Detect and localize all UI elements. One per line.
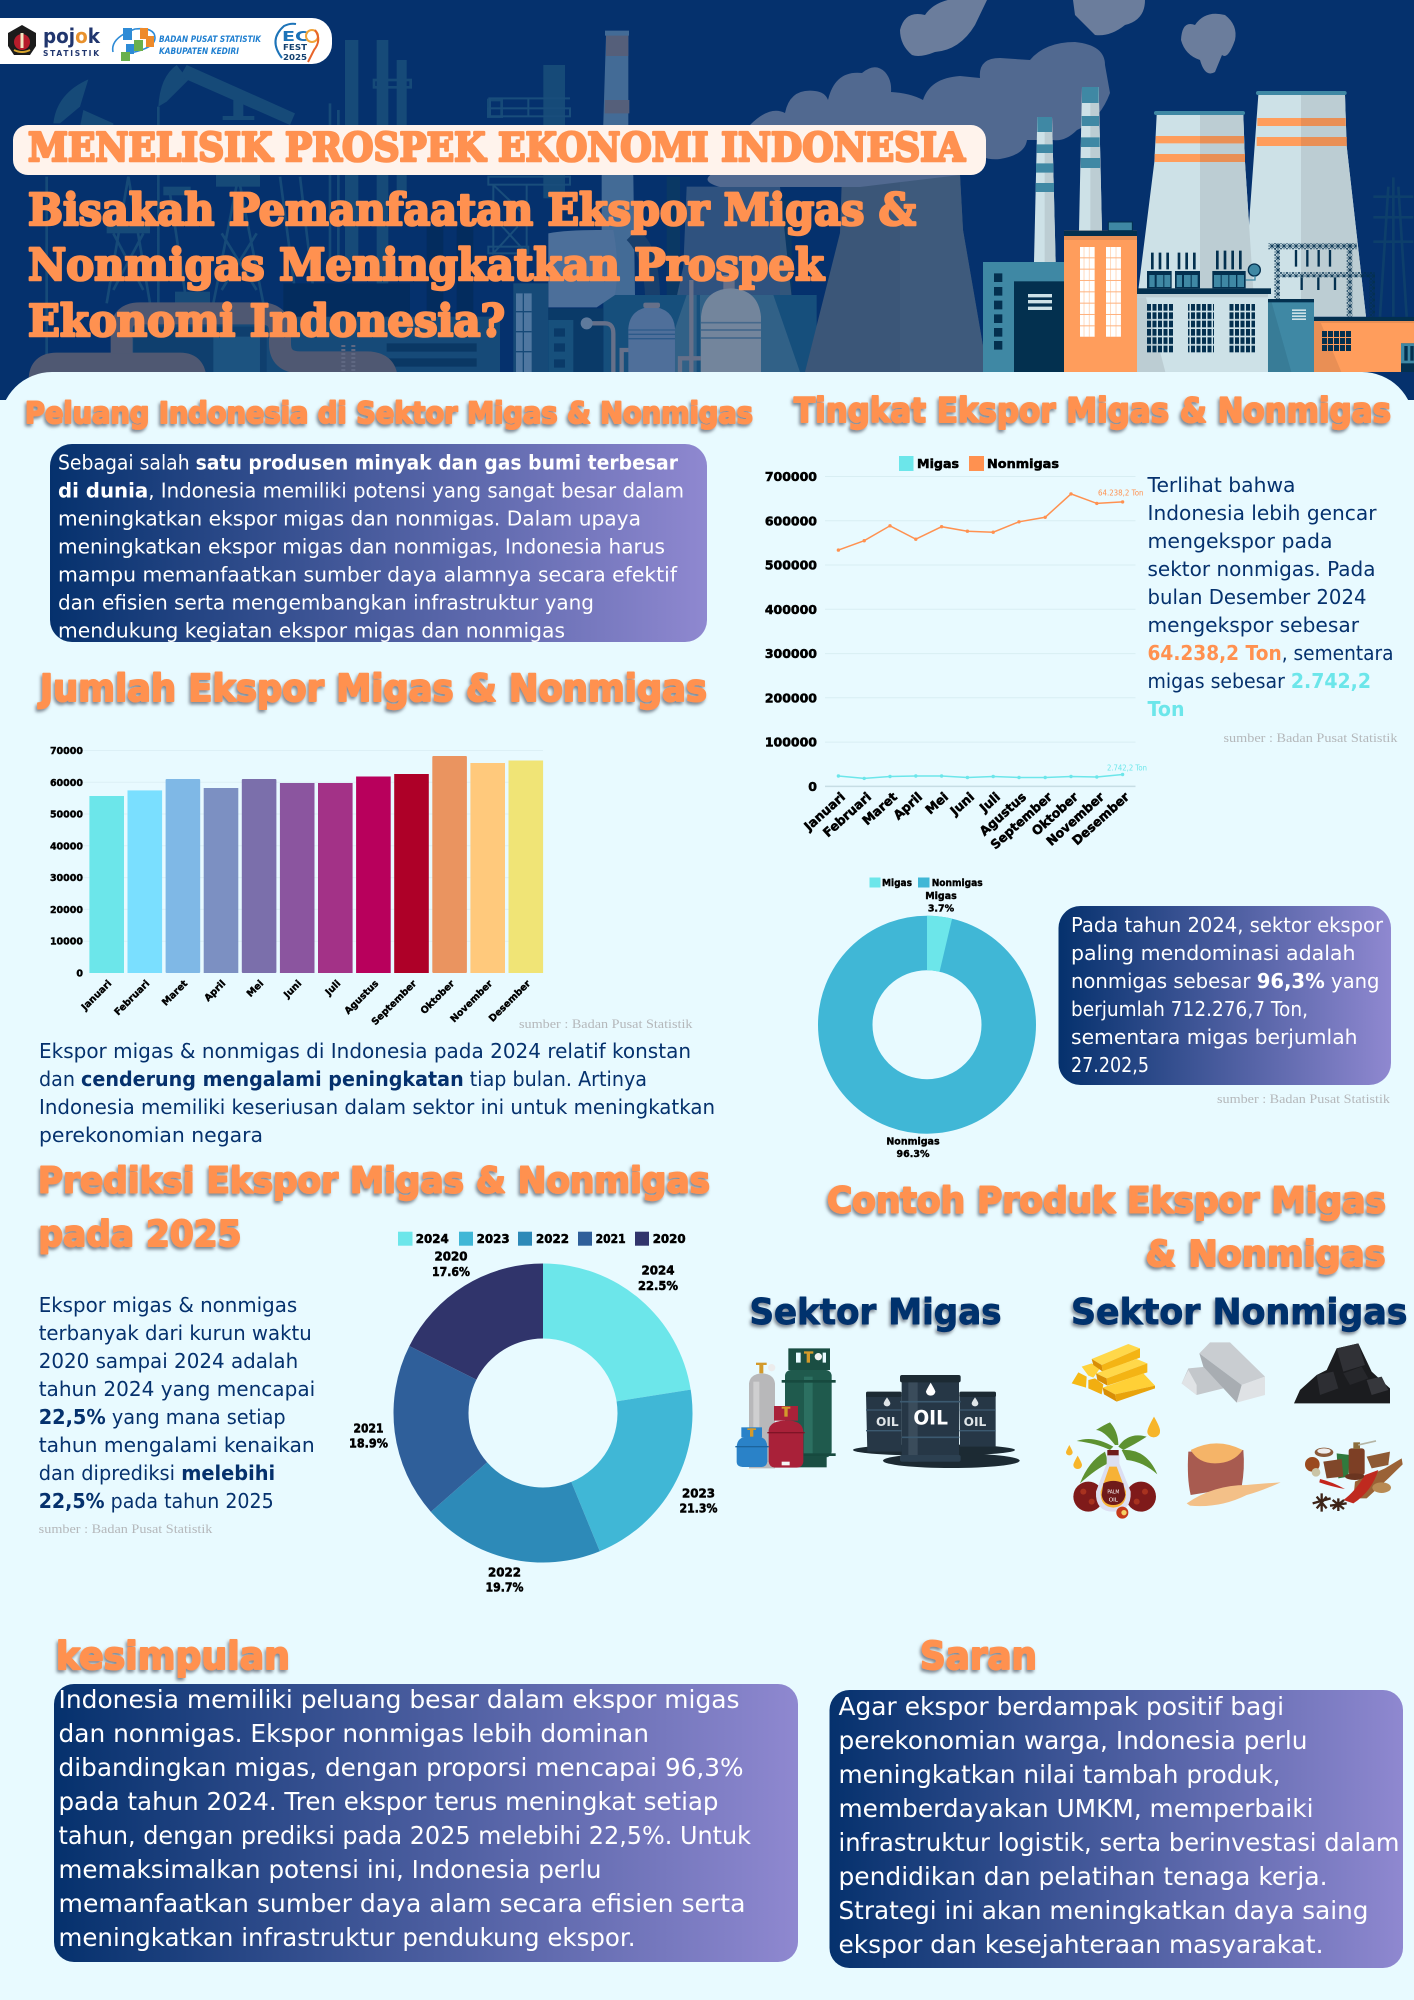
line chart: tingkat ekspor: Juni xyxy=(946,789,977,819)
donut chart: persentase per tahun: 19.7% xyxy=(486,1580,524,1594)
paragraph: prediksi: terbanyak dari kurun waktu xyxy=(39,1321,312,1345)
line chart: tingkat ekspor: Agustus xyxy=(976,789,1029,839)
text box: kesimpulan: tahun, dengan prediksi pada 2025 melebihi 22,5%. Untuk xyxy=(58,1821,751,1850)
bar chart: jumlah ekspor per bulan: September xyxy=(370,978,419,1028)
heading: Prediksi Ekspor xyxy=(38,1160,710,1255)
line chart: tingkat ekspor: Juli xyxy=(976,789,1003,816)
text box: dominasi nonmigas: 27.202,5 xyxy=(1071,1053,1149,1077)
donut chart: proporsi migas nonmigas xyxy=(845,878,1009,1160)
icon: grain sack xyxy=(1187,1443,1281,1506)
paragraph: terlihat bahwa: mengekspor sebesar xyxy=(1148,613,1360,637)
text box: kesimpulan: dibandingkan migas, dengan proporsi mencapai 96,3% xyxy=(58,1753,744,1782)
line chart: tingkat ekspor: November xyxy=(1043,789,1108,849)
donut chart: proporsi migas nonmigas: 96.3% xyxy=(897,1149,930,1160)
bar chart: jumlah ekspor per bulan: Juni xyxy=(281,978,304,1001)
line chart: tingkat ekspor xyxy=(765,456,1147,852)
text box: dominasi nonmigas: paling mendominasi adalah xyxy=(1071,941,1356,965)
series: nonmigas xyxy=(838,494,1123,550)
donut chart: persentase per tahun: 2020 xyxy=(434,1248,468,1264)
bar chart: jumlah ekspor per bulan: 10000 xyxy=(50,937,83,948)
text box: saran: Agar ekspor berdampak positif bagi xyxy=(838,1692,1284,1721)
bar chart: jumlah ekspor per bulan: Maret xyxy=(160,978,190,1008)
line chart: tingkat ekspor: 100000 xyxy=(765,735,817,750)
bar chart: jumlah ekspor per bulan: 70000 xyxy=(50,746,83,757)
donut chart: persentase per tahun: 21.3% xyxy=(680,1500,718,1516)
paragraph: prediksi: Ekspor migas & nonmigas xyxy=(39,1293,297,1317)
subheading: Sektor Migas: Sektor Migas xyxy=(750,1292,1002,1333)
main question title xyxy=(28,185,916,347)
line chart: tingkat ekspor: 700000 xyxy=(765,469,817,484)
logo: pojok statistik: pojok xyxy=(43,24,101,48)
logo text: Badan Pusat Statistik: KABUPATEN KEDIRI xyxy=(159,47,240,57)
line chart: tingkat ekspor: 600000 xyxy=(765,513,817,528)
text box: saran: Strategi ini akan meningkatkan daya saing xyxy=(838,1896,1368,1925)
bar chart: jumlah ekspor per bulan: 0 xyxy=(76,968,83,980)
line chart: tingkat ekspor: Desember xyxy=(1069,789,1133,848)
main question title: Bisakah Pemanfaatan Ekspor Migas & xyxy=(28,185,916,236)
line chart: tingkat ekspor: 64.238,2 Ton xyxy=(1098,488,1144,498)
logo text: Badan Pusat Statistik: BADAN PUSAT STATISTIK xyxy=(159,35,262,45)
heading: Peluang Indonesia: Peluang Indonesia di Sektor Migas & Nonmigas xyxy=(25,396,753,430)
bar chart: jumlah ekspor per bulan: 60000 xyxy=(50,778,83,789)
heading: Contoh Produk: Contoh Produk Ekspor Migas xyxy=(827,1180,1386,1222)
bar chart: jumlah ekspor per bulan: 30000 xyxy=(50,873,83,884)
paragraph: terlihat bahwa: Terlihat bahwa xyxy=(1147,473,1296,497)
paragraph: terlihat bahwa: sektor nonmigas. Pada xyxy=(1148,557,1376,581)
icon: palm oil xyxy=(1066,1417,1160,1519)
text box: kesimpulan: memanfaatkan sumber daya alam secara efisien serta xyxy=(58,1889,746,1918)
bar chart: jumlah ekspor per bulan: Agustus xyxy=(343,978,381,1017)
text box: kesimpulan: memaksimalkan potensi ini, Indonesia perlu xyxy=(58,1855,602,1884)
bar chart: jumlah ekspor per bulan: 20000 xyxy=(50,905,83,916)
logo: Eco Fest 2025 xyxy=(275,24,318,62)
donut chart: persentase per tahun: 2023 xyxy=(682,1486,715,1500)
paragraph: prediksi xyxy=(39,1293,315,1513)
line chart: tingkat ekspor: 300000 xyxy=(765,646,817,661)
paragraph: terlihat bahwa xyxy=(1147,473,1394,721)
icon: oil barrels: OIL xyxy=(913,1407,948,1430)
donut chart: proporsi migas nonmigas: Migas xyxy=(925,891,957,902)
icon: oil barrels xyxy=(853,1375,1020,1468)
paragraph: terlihat bahwa: mengekspor pada xyxy=(1148,529,1332,553)
bar chart: jumlah ekspor per bulan: April xyxy=(202,978,228,1004)
donut chart: persentase per tahun: 2024 xyxy=(642,1262,675,1278)
logo text: Badan Pusat Statistik xyxy=(159,35,262,57)
icon: coal xyxy=(1294,1343,1390,1403)
text box: saran: pendidikan dan pelatihan tenaga kerja. xyxy=(838,1862,1328,1891)
text box: kesimpulan xyxy=(54,1684,798,1962)
line chart legend xyxy=(899,456,1059,471)
bar chart: jumlah ekspor per bulan xyxy=(50,746,543,1028)
bar chart: jumlah ekspor per bulan: 50000 xyxy=(50,810,83,820)
line chart: tingkat ekspor: 2.742,2 Ton xyxy=(1107,764,1147,772)
text box: dominasi nonmigas: sementara migas berjumlah xyxy=(1071,1025,1358,1049)
bar chart: jumlah ekspor per bulan: Oktober xyxy=(419,978,457,1017)
donut chart: proporsi migas nonmigas: Migas xyxy=(882,878,912,889)
paragraph: prediksi: tahun mengalami kenaikan xyxy=(39,1433,315,1457)
icon: silver bars xyxy=(1182,1342,1265,1403)
logo strip xyxy=(0,18,332,64)
heading: Saran: Saran xyxy=(920,1634,1037,1678)
line chart: tingkat ekspor: April xyxy=(890,789,925,823)
icon: gas cylinders xyxy=(735,1348,836,1468)
paragraph: ekspor relatif konstan: Indonesia memiliki keseriusan dalam sektor ini untuk meningkatkan xyxy=(39,1095,715,1119)
line chart: tingkat ekspor: Oktober xyxy=(1029,789,1082,838)
subheading: Sektor Nonmigas: Sektor Nonmigas xyxy=(1071,1292,1408,1333)
heading: kesimpulan: kesimpulan xyxy=(56,1634,290,1678)
text box: kesimpulan: dan nonmigas. Ekspor nonmigas lebih dominan xyxy=(58,1719,649,1748)
line chart: tingkat ekspor: 200000 xyxy=(765,690,817,705)
line chart: tingkat ekspor: Maret xyxy=(859,789,900,828)
paragraph: terlihat bahwa: 64.238,2 Ton, sementara xyxy=(1148,641,1394,665)
donut legend: 2020 xyxy=(653,1231,686,1246)
donut legend: 2022 xyxy=(536,1231,569,1246)
donut chart: persentase per tahun: 2021 xyxy=(354,1420,384,1436)
line chart: tingkat ekspor: 0 xyxy=(808,779,817,794)
donut chart: persentase per tahun: 22.5% xyxy=(638,1278,678,1293)
logo: Eco Fest 2025: FEST xyxy=(283,43,308,52)
text box: saran: ekspor dan kesejahteraan masyarakat. xyxy=(838,1930,1324,1959)
bar chart: jumlah ekspor per bulan: Desember xyxy=(487,978,533,1024)
paragraph: prediksi: dan diprediksi melebihi xyxy=(39,1461,275,1485)
title pill: MENELISIK PROSPEK EKONOMI INDONESIA xyxy=(28,125,966,171)
bar chart: jumlah ekspor per bulan: Februari xyxy=(112,978,152,1018)
donut chart: proporsi migas nonmigas: Nonmigas xyxy=(932,878,983,889)
background silhouettes: oil field xyxy=(38,40,502,380)
line chart: tingkat ekspor: 500000 xyxy=(765,558,817,572)
paragraph: ekspor relatif konstan: Ekspor migas & nonmigas di Indonesia pada 2024 relatif konstan xyxy=(39,1039,691,1063)
header background xyxy=(0,0,1414,400)
line chart: tingkat ekspor: Januari xyxy=(800,789,848,834)
text box: peluang: Sebagai salah satu produsen minyak dan gas bumi terbesar xyxy=(58,450,679,474)
logo: pojok statistik: STATISTIK xyxy=(43,49,100,58)
paragraph: terlihat bahwa: Ton xyxy=(1148,697,1184,721)
background cooling tower xyxy=(805,175,983,372)
paragraph: prediksi: 2020 sampai 2024 adalah xyxy=(39,1349,298,1373)
donut chart: proporsi migas nonmigas: Nonmigas xyxy=(886,1136,940,1148)
paragraph: prediksi: 22,5% yang mana setiap xyxy=(39,1405,286,1429)
text box: saran: memberdayakan UMKM, memperbaiki xyxy=(838,1794,1314,1823)
text box: dominasi nonmigas: Pada tahun 2024, sektor ekspor xyxy=(1071,913,1384,937)
logo: BPS xyxy=(113,28,155,61)
text box: peluang: meningkatkan ekspor migas dan nonmigas, Indonesia harus xyxy=(58,534,665,558)
logo: university emblem xyxy=(8,25,36,55)
text box: saran: infrastruktur logistik, serta berinvestasi dalam xyxy=(838,1828,1400,1857)
line chart legend: Migas xyxy=(917,456,959,471)
icon: spices xyxy=(1305,1441,1403,1512)
paragraph: ekspor relatif konstan xyxy=(39,1039,715,1147)
icon: palm oil: PALM xyxy=(1107,1489,1119,1495)
text box: peluang xyxy=(50,444,707,642)
heading: Prediksi Ekspor: Prediksi Ekspor Migas & Nonmigas xyxy=(38,1160,710,1202)
heading: Jumlah Ekspor: Jumlah Ekspor Migas & Nonmigas xyxy=(37,667,707,710)
smoke clouds xyxy=(708,0,1236,187)
icon: palm oil: OIL xyxy=(1109,1498,1119,1504)
source note: donut chart: sumber : Badan Pusat Statistik xyxy=(1217,1091,1391,1106)
donut legend: 2021 xyxy=(596,1231,626,1246)
heading: Contoh Produk xyxy=(827,1180,1386,1275)
text box: dominasi nonmigas: nonmigas sebesar 96,3% yang xyxy=(1071,969,1380,993)
heading: Prediksi Ekspor: pada 2025 xyxy=(38,1214,242,1255)
text box: peluang: meningkatkan ekspor migas dan nonmigas. Dalam upaya xyxy=(58,506,641,530)
source note: line chart: sumber : Badan Pusat Statistik xyxy=(1224,730,1398,745)
text box: dominasi nonmigas: berjumlah 712.276,7 Ton, xyxy=(1071,997,1308,1021)
paragraph: ekspor relatif konstan: dan cenderung mengalami peningkatan tiap bulan. Artinya xyxy=(39,1067,647,1091)
source note: prediksi: sumber : Badan Pusat Statistik xyxy=(39,1521,213,1536)
illustration: power plant xyxy=(983,87,1414,372)
line chart: tingkat ekspor: 400000 xyxy=(765,602,817,617)
bar chart: jumlah ekspor per bulan: 40000 xyxy=(50,841,83,852)
donut chart: proporsi migas nonmigas: 3.7% xyxy=(928,904,955,914)
bar chart: jumlah ekspor per bulan: Januari xyxy=(79,978,114,1014)
bar chart: jumlah ekspor per bulan: Mei xyxy=(245,978,266,1000)
donut legend: 2023 xyxy=(477,1231,510,1246)
line chart: tingkat ekspor: Februari xyxy=(820,789,874,840)
line chart: tingkat ekspor: September xyxy=(987,789,1056,852)
paragraph: prediksi: 22,5% pada tahun 2025 xyxy=(39,1489,274,1513)
line chart legend: Nonmigas xyxy=(987,456,1059,471)
logo: Eco Fest 2025: EC xyxy=(282,30,309,45)
text box: kesimpulan: Indonesia memiliki peluang besar dalam ekspor migas xyxy=(58,1685,740,1714)
text box: kesimpulan: meningkatkan infrastruktur pendukung ekspor. xyxy=(58,1923,636,1952)
main question title: Nonmigas Meningkatkan Prospek xyxy=(28,240,825,291)
paragraph: terlihat bahwa: migas sebesar 2.742,2 xyxy=(1148,669,1371,693)
bar chart: jumlah ekspor per bulan: Juli xyxy=(323,978,343,999)
source note: bar chart: sumber : Badan Pusat Statistik xyxy=(519,1016,693,1031)
text box: peluang: di dunia, Indonesia memiliki potensi yang sangat besar dalam xyxy=(58,478,684,502)
donut legend: 2024 xyxy=(416,1231,449,1246)
paragraph: terlihat bahwa: Indonesia lebih gencar xyxy=(1148,501,1377,525)
text box: peluang: mendukung kegiatan ekspor migas dan nonmigas xyxy=(58,618,565,642)
paragraph: prediksi: tahun 2024 yang mencapai xyxy=(39,1377,315,1401)
donut chart: persentase per tahun xyxy=(349,1231,718,1594)
text box: saran xyxy=(830,1690,1403,1968)
text box: dominasi nonmigas xyxy=(1058,906,1391,1085)
bar chart: jumlah ekspor per bulan: November xyxy=(448,978,495,1025)
series: migas xyxy=(838,774,1123,778)
paragraph: terlihat bahwa: bulan Desember 2024 xyxy=(1148,585,1366,609)
donut legend xyxy=(398,1231,686,1246)
icon: gold bars xyxy=(1072,1344,1155,1402)
icon: oil barrels: OIL xyxy=(964,1415,987,1429)
donut chart: persentase per tahun: 18.9% xyxy=(349,1436,388,1450)
main question title: Ekonomi Indonesia? xyxy=(28,296,505,347)
heading: Contoh Produk: & Nonmigas xyxy=(1146,1234,1386,1275)
line chart: tingkat ekspor: Mei xyxy=(922,789,951,817)
logo: Eco Fest 2025: 2025 xyxy=(283,53,307,62)
paragraph: ekspor relatif konstan: perekonomian negara xyxy=(39,1123,263,1147)
text box: saran: meningkatkan nilai tambah produk, xyxy=(838,1760,1280,1789)
text box: peluang: mampu memanfaatkan sumber daya alamnya secara efektif xyxy=(58,562,678,586)
icon: oil barrels: OIL xyxy=(876,1415,899,1429)
donut chart: persentase per tahun: 17.6% xyxy=(432,1264,470,1279)
text box: saran: perekonomian warga, Indonesia perlu xyxy=(838,1726,1308,1755)
text box: peluang: dan efisien serta mengembangkan infrastruktur yang xyxy=(58,590,594,614)
text box: kesimpulan: pada tahun 2024. Tren ekspor terus meningkat setiap xyxy=(58,1787,718,1816)
donut chart: persentase per tahun: 2022 xyxy=(488,1564,521,1580)
background silhouettes: refinery xyxy=(488,31,817,372)
